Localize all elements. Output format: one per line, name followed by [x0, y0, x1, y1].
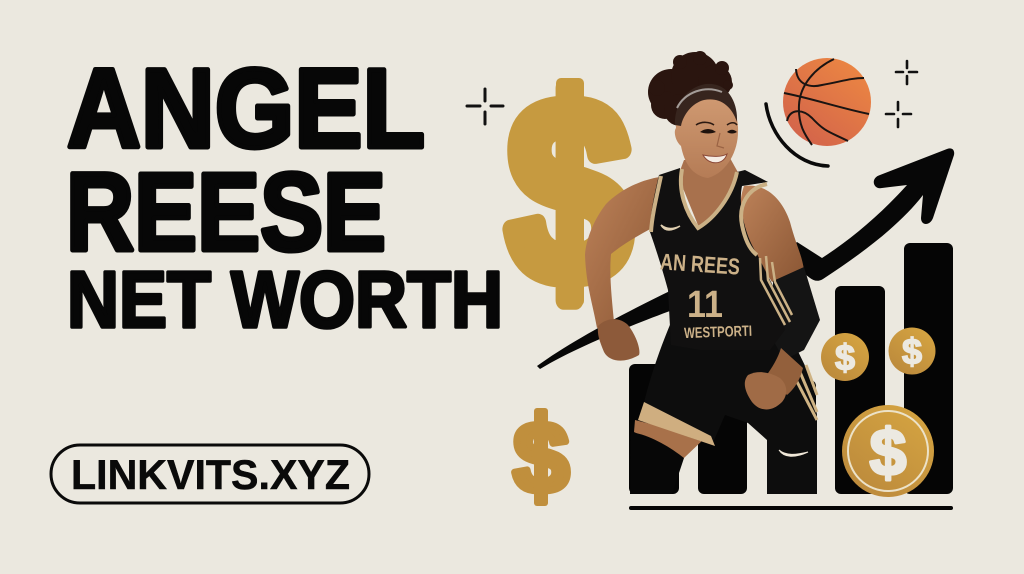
headband [677, 89, 722, 108]
player head hair [675, 84, 737, 126]
sparkle lower right [886, 102, 911, 127]
jersey lower text: WESTPORTI [684, 323, 752, 342]
chart baseline [629, 506, 953, 510]
player right fist [745, 372, 786, 410]
player eyes, brows, nose and smile [696, 122, 737, 163]
player left arm [585, 177, 660, 328]
coin small right [888, 328, 936, 374]
jersey [650, 168, 785, 350]
sparkle top right [896, 61, 917, 84]
shorts side stripes [794, 365, 817, 420]
player face [675, 95, 738, 178]
player thigh [634, 420, 705, 458]
jersey collar trim [681, 169, 737, 228]
player shorts [640, 320, 817, 494]
large gold dollar sign: $ [508, 47, 630, 337]
coin small left: $ [835, 337, 855, 378]
title [66, 46, 503, 344]
title line: REESE: REESE [66, 151, 386, 274]
player [585, 51, 820, 494]
bar chart [629, 243, 953, 510]
coin large: $ [870, 415, 906, 489]
website pill: LINKVITS.XYZ [71, 451, 350, 498]
coin small left [821, 333, 869, 381]
shorts swoosh [779, 450, 808, 456]
player right forearm [766, 348, 803, 395]
player neck and chest [678, 158, 740, 230]
jersey side stripes [760, 256, 792, 325]
jersey swoosh [661, 225, 680, 230]
growth arrow [537, 148, 954, 369]
player right sleeve [773, 267, 820, 360]
small gold dollar sign: $ [513, 402, 569, 514]
player left fist [598, 319, 639, 361]
player hair [648, 51, 733, 126]
basketball [783, 58, 871, 146]
title line: ANGEL: ANGEL [67, 46, 425, 171]
jersey arm trim [651, 176, 767, 255]
player right arm [740, 186, 804, 282]
title line: NET WORTH: NET WORTH [67, 255, 503, 344]
ball motion arc [766, 104, 828, 166]
jersey number: 11 [687, 284, 723, 326]
player sock [630, 432, 684, 494]
shorts hem [638, 402, 715, 446]
sparkle left [467, 89, 503, 124]
coin small right: $ [902, 331, 922, 372]
coin large [842, 405, 934, 497]
jersey name: AN REES [659, 248, 741, 280]
